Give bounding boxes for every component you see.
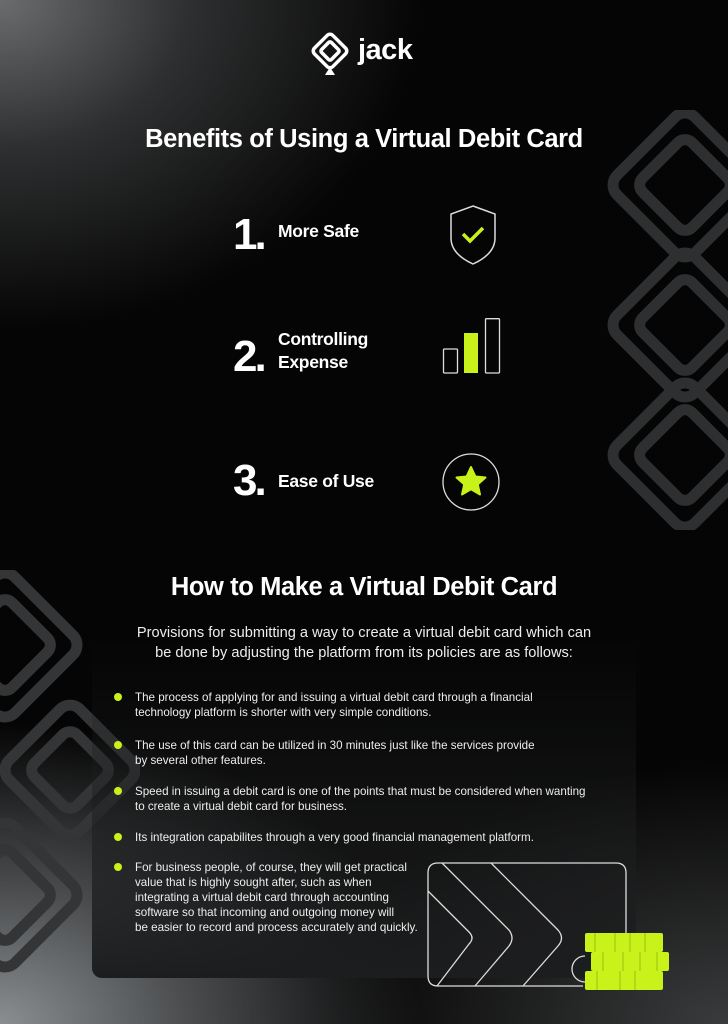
title: how to: How to Make a Virtual Debit Card xyxy=(171,573,557,601)
bullet 3: Speed in issuing a debit card is one of the points that must be considered when wanting xyxy=(135,785,586,798)
bullet 3: to create a virtual debit card for business. xyxy=(135,800,347,813)
item 1: More Safe xyxy=(278,221,359,241)
item 2: Controlling xyxy=(278,329,368,349)
icon: shield xyxy=(450,205,496,265)
bullet 1: The process of applying for and issuing a virtual debit card through a financial xyxy=(135,691,533,704)
item 2 xyxy=(233,318,500,381)
bullet 5: be easier to record and process accurately and quickly. xyxy=(135,921,418,934)
logo xyxy=(312,32,413,75)
item 1 xyxy=(233,205,496,265)
bullet 5: For business people, of course, they will get practical xyxy=(135,861,407,874)
decorative maze right xyxy=(608,110,728,530)
icon: bars xyxy=(442,318,500,374)
bullet 5: integrating a virtual debit card through accounting xyxy=(135,891,389,904)
decorative maze left xyxy=(0,570,140,972)
logo: jack xyxy=(358,34,412,66)
item 2: 2. xyxy=(233,332,264,381)
item 3: Ease of Use xyxy=(278,471,374,491)
bullet 5: software so that incoming and outgoing money will xyxy=(135,906,394,919)
illustration: card with coins xyxy=(427,862,669,990)
item 1: 1. xyxy=(233,210,264,259)
bullet 5 xyxy=(114,861,418,934)
bullet 4: Its integration capabilites through a very good financial management platform. xyxy=(135,831,534,844)
title: benefits: Benefits of Using a Virtual Debit Card xyxy=(145,125,583,153)
bullet 2 xyxy=(114,739,535,767)
item 3: 3. xyxy=(233,456,264,505)
icon: star circle xyxy=(442,453,500,511)
item 3 xyxy=(233,453,500,511)
bullet list xyxy=(114,691,586,934)
bullet 5: value that is highly sought after, such as when xyxy=(135,876,372,889)
item 2: Expense xyxy=(278,352,348,372)
bullet 1 xyxy=(114,691,533,719)
bullet 1: technology platform is shorter with very simple conditions. xyxy=(135,706,431,719)
bullet 2: by several other features. xyxy=(135,754,266,767)
intro text xyxy=(137,625,591,661)
bullet 2: The use of this card can be utilized in 30 minutes just like the services provide xyxy=(135,739,535,752)
bullet 3 xyxy=(114,785,586,813)
intro text: Provisions for submitting a way to create a virtual debit card which can xyxy=(137,625,591,641)
intro text: be done by adjusting the platform from its policies are as follows: xyxy=(155,645,573,661)
panel: how-to background xyxy=(92,640,636,978)
